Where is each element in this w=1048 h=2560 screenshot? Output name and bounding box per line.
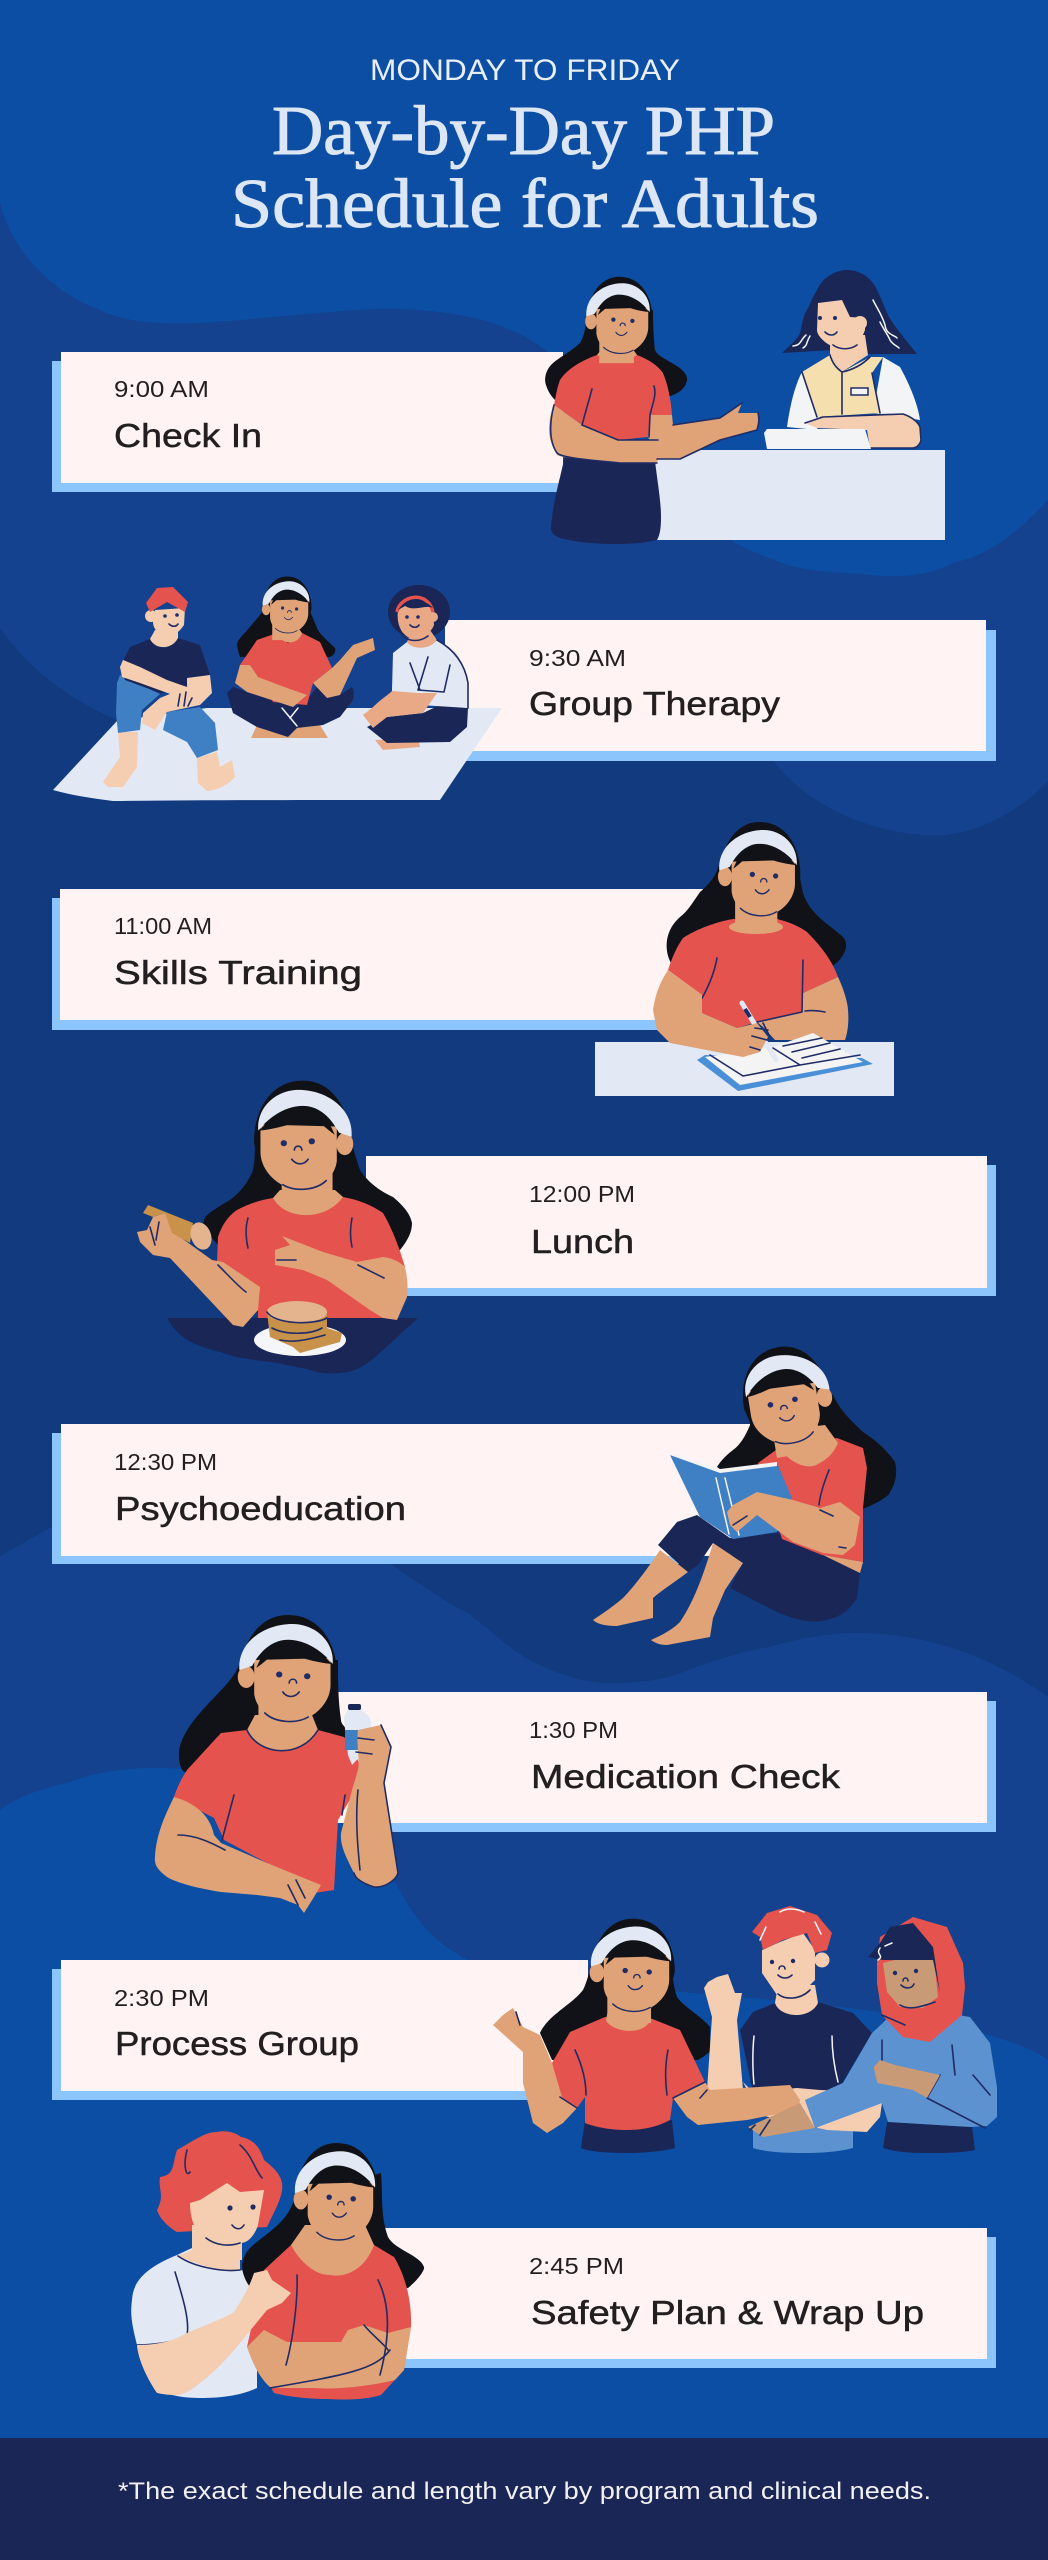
title line 1: Day-by-Day PHP xyxy=(272,93,775,170)
heading: Safety Plan and Wrap Up: Safety Plan & Wrap Up xyxy=(531,2294,924,2331)
time: 12:00 PM: 12:00 PM xyxy=(529,1181,635,1207)
time: 1:30 PM: 1:30 PM xyxy=(529,1717,618,1743)
woman at desk xyxy=(545,277,759,544)
illustration: three friends talking xyxy=(493,1906,997,2153)
background: lower bright wave xyxy=(0,1768,1048,2560)
time: 12:30 PM: 12:30 PM xyxy=(114,1449,217,1475)
panel: 1:30 PM Medication Check xyxy=(335,1692,996,1832)
plate of pancakes xyxy=(254,1301,346,1356)
illustration: woman holding water bottle xyxy=(155,1615,398,1913)
panel: 9:00 AM Check In xyxy=(52,352,563,492)
man with red hair xyxy=(704,1906,882,2153)
time: 2:30 PM: 2:30 PM xyxy=(114,1985,209,2011)
panel: 12:30 PM Psychoeducation xyxy=(52,1424,751,1564)
kicker: Monday to Friday: MONDAY TO FRIDAY xyxy=(370,54,680,87)
water bottle xyxy=(344,1704,371,1765)
panel: 2:45 PM Safety Plan and Wrap Up xyxy=(380,2228,996,2368)
panel: 9:30 AM Group Therapy xyxy=(445,620,996,761)
illustration: group sitting on mat xyxy=(53,576,502,801)
woman in hijab xyxy=(805,1917,997,2153)
panel: 2:30 PM Process Group xyxy=(52,1960,588,2100)
footer bar xyxy=(0,2438,1048,2560)
food roll xyxy=(143,1205,215,1253)
background: top bright wave xyxy=(0,0,1048,576)
table xyxy=(595,1042,894,1096)
man with red hair xyxy=(103,587,235,791)
man with red hair xyxy=(131,2131,282,2398)
pen xyxy=(742,1003,776,1060)
heading: Medication Check: Medication Check xyxy=(531,1758,841,1795)
background: lower mid-blue wave xyxy=(0,1528,1048,2560)
header xyxy=(231,54,819,243)
mat xyxy=(53,708,502,801)
background: upper mid-blue wave xyxy=(0,0,1048,836)
table xyxy=(168,1318,418,1374)
heading: Group Therapy: Group Therapy xyxy=(529,685,781,722)
illustration: two friends embracing xyxy=(131,2131,424,2400)
title line 2: Schedule for Adults xyxy=(231,166,819,243)
time: 9:00 AM: 9:00 AM xyxy=(114,376,209,402)
illustration: woman eating lunch xyxy=(137,1081,418,1374)
woman in red shirt xyxy=(493,1919,800,2153)
time: 9:30 AM: 9:30 AM xyxy=(529,645,626,671)
illustration: woman reading a book xyxy=(593,1340,896,1645)
woman seated centre xyxy=(227,576,375,738)
time: 11:00 AM: 11:00 AM xyxy=(114,913,212,939)
woman seated right xyxy=(363,585,468,750)
heading: Psychoeducation: Psychoeducation xyxy=(115,1490,406,1527)
footnote: *The exact schedule and length vary by program and clinical needs. xyxy=(118,2478,931,2505)
back hair of woman in red xyxy=(540,1957,710,2060)
panel: 11:00 AM Skills Training xyxy=(52,889,703,1030)
heading: Process Group: Process Group xyxy=(115,2025,359,2062)
clasped hands xyxy=(748,2060,882,2137)
heading: Check In: Check In xyxy=(114,417,262,454)
panel: 12:00 PM Lunch xyxy=(366,1156,996,1296)
woman in red shirt xyxy=(137,2143,424,2400)
heading: Skills Training: Skills Training xyxy=(114,954,362,991)
time: 2:45 PM: 2:45 PM xyxy=(529,2253,624,2279)
heading: Lunch: Lunch xyxy=(531,1223,634,1260)
desk xyxy=(655,450,945,540)
notebook xyxy=(697,1033,873,1091)
illustration: check in at reception desk xyxy=(545,270,945,544)
receptionist xyxy=(764,270,921,449)
illustration: woman writing in notebook xyxy=(595,822,894,1096)
open book xyxy=(670,1455,792,1539)
